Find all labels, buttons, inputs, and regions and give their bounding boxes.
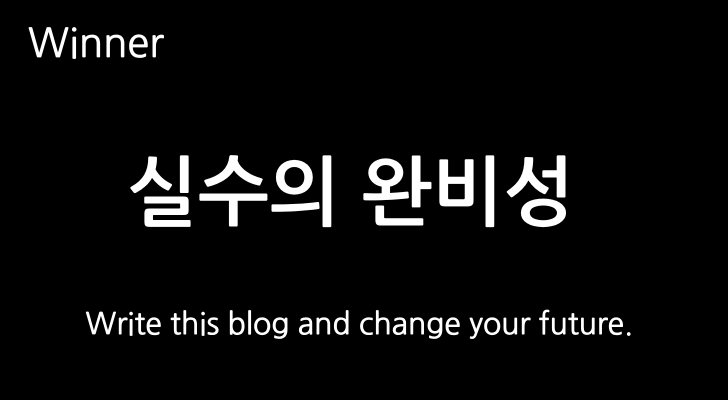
heading: Winner: Winner: [28, 23, 164, 63]
text block: tagline: Write this blog and change your future.: [86, 309, 633, 339]
title: Korean headline: 실수의 완비성: [127, 157, 574, 231]
